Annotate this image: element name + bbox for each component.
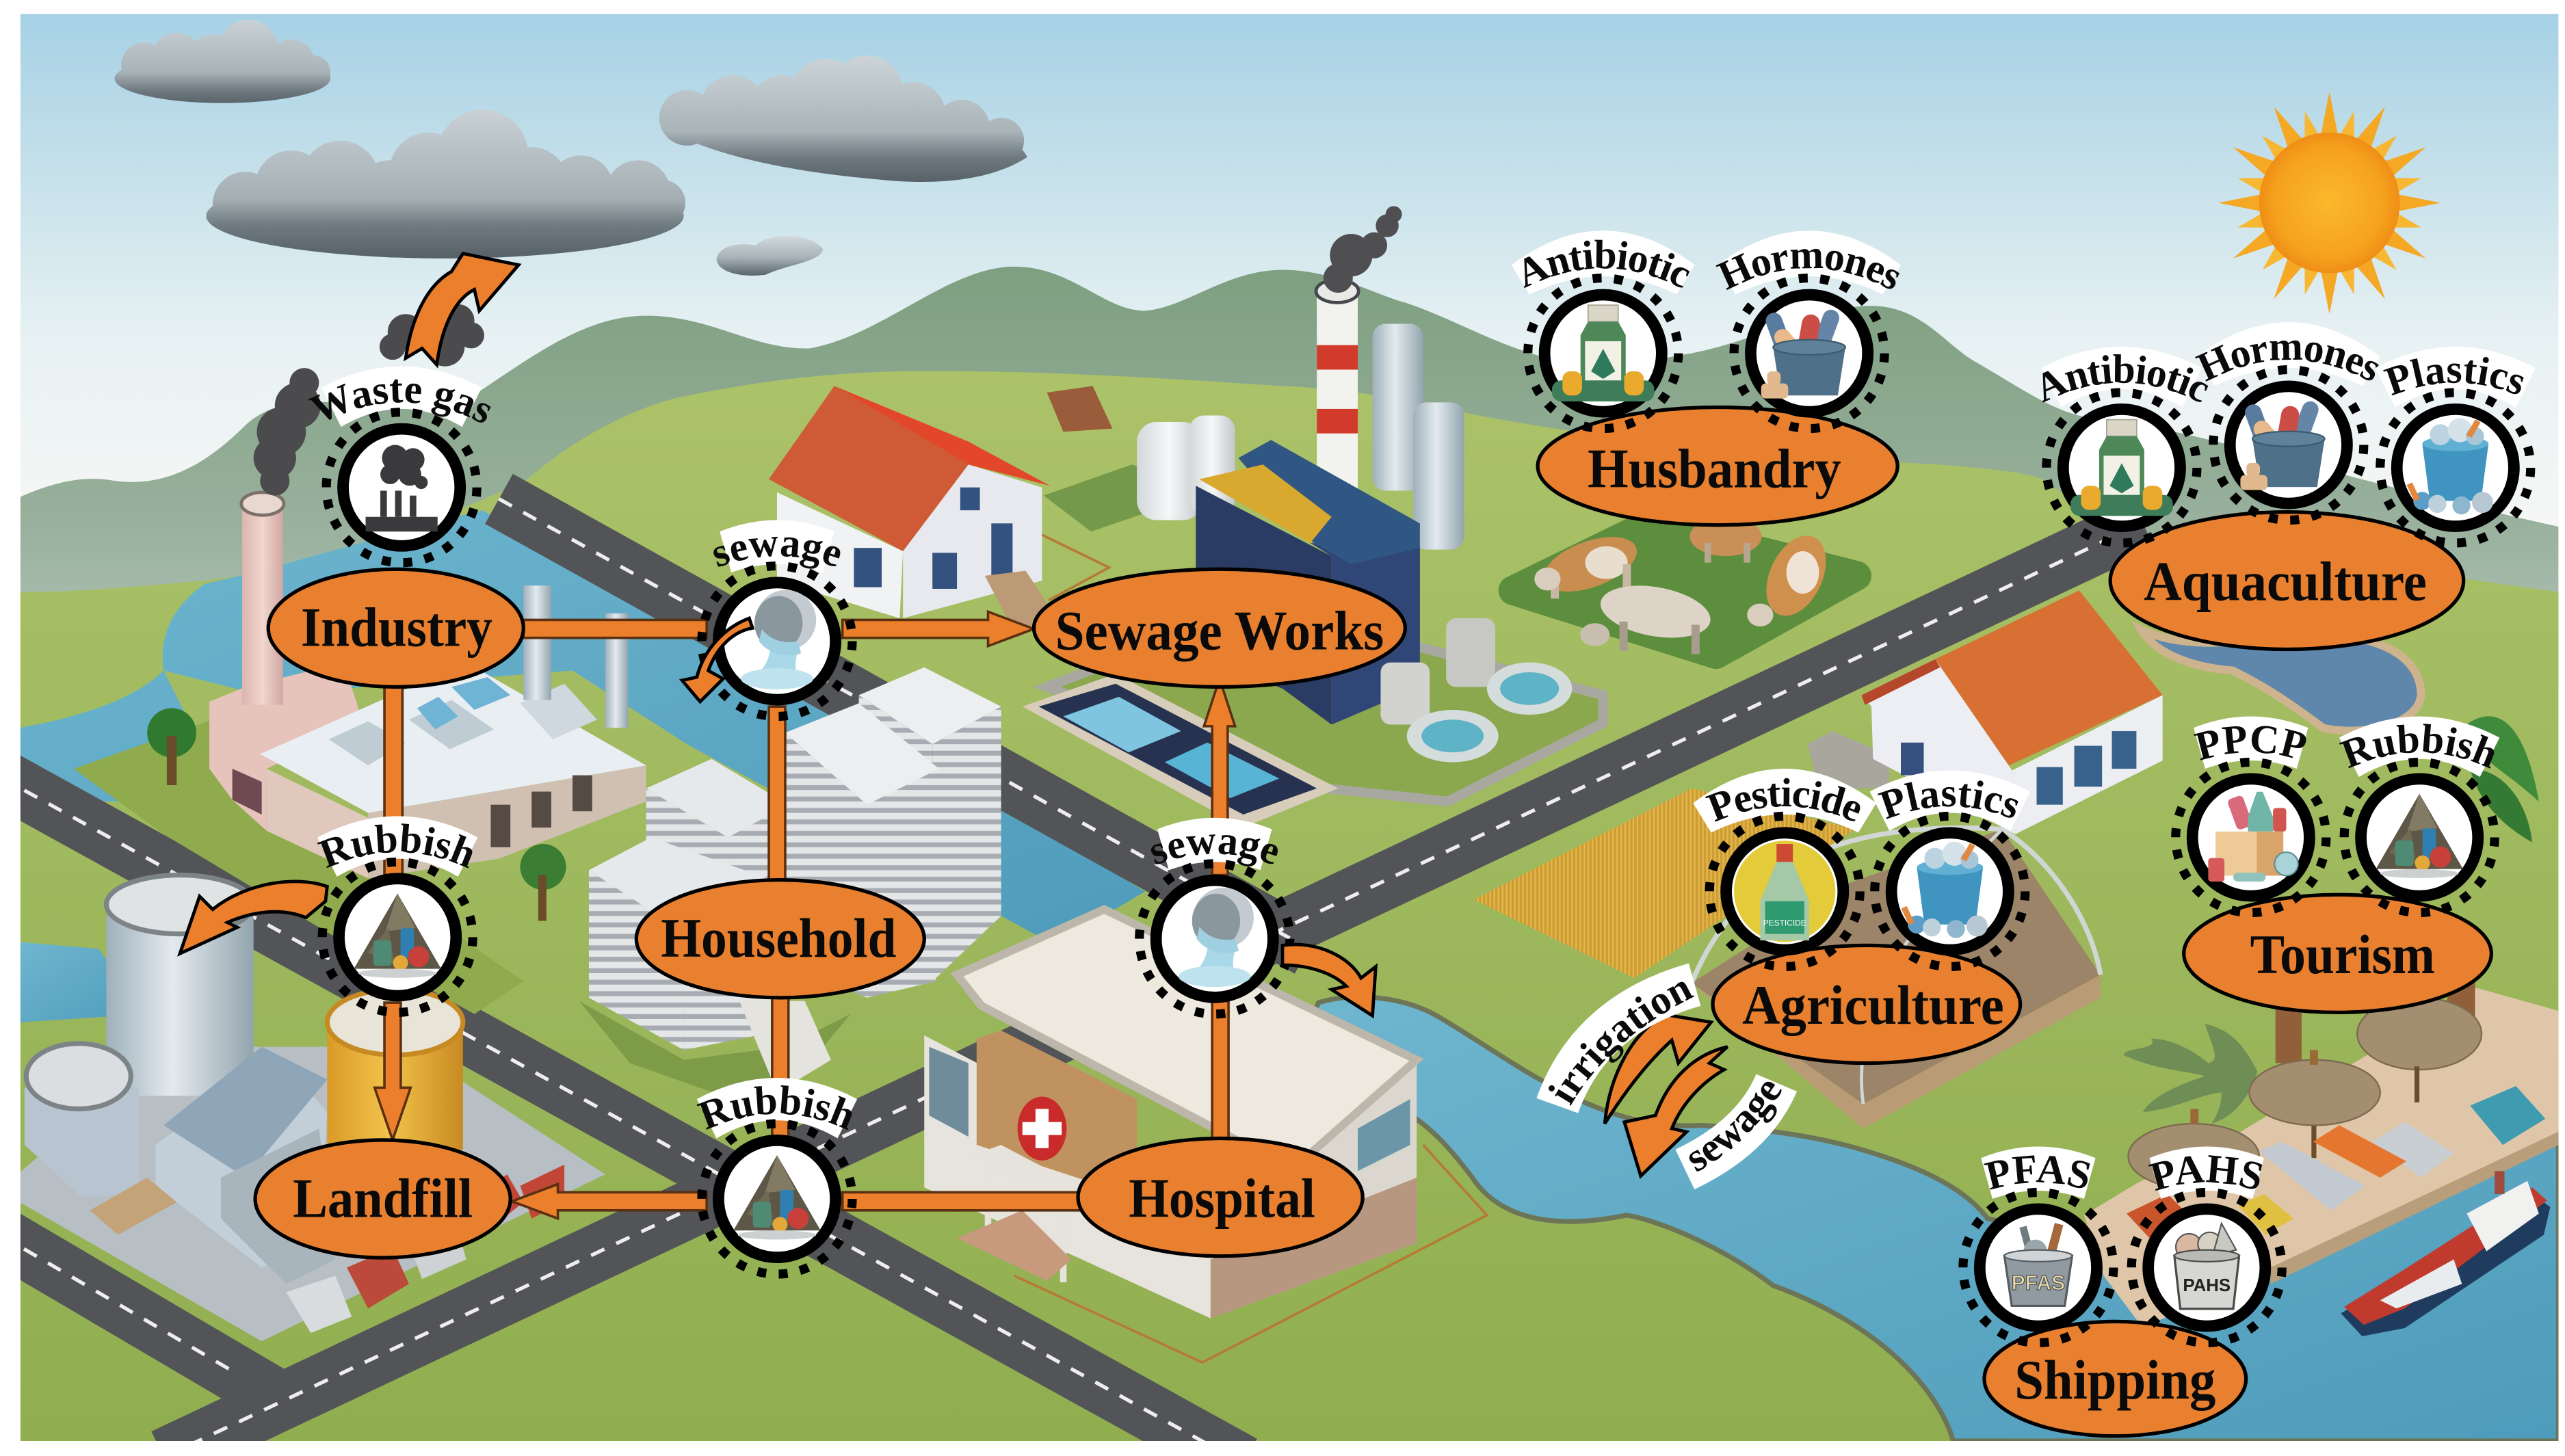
icon: Rubbish (industry) <box>313 816 482 1012</box>
icon: Rubbish (tourism): Rubbish <box>2335 716 2504 777</box>
cloud small top left <box>114 20 330 103</box>
node: Sewage Works: Sewage Works <box>1055 600 1384 661</box>
icon: PFAS: PFAS <box>2012 1272 2065 1295</box>
icon: Pesticide: PESTICIDE <box>1763 918 1806 928</box>
husbandry pasture with cows <box>1513 517 1856 654</box>
arrow: industry to rubbish <box>384 687 402 875</box>
arrow: household to rubbish <box>772 998 789 1141</box>
node: Shipping <box>1984 1321 2246 1436</box>
icon: Hormones (aquaculture) <box>2190 322 2388 520</box>
arrow: hospital to rubbish to landfill <box>512 1184 1083 1219</box>
node: Landfill: Landfill <box>293 1167 473 1229</box>
node: Agriculture <box>1713 945 2021 1063</box>
icon: sewage (hospital): sewage <box>1143 817 1286 874</box>
lower left river <box>21 942 107 1022</box>
icon: Plastics (aquaculture): Plastics <box>2380 347 2532 404</box>
canal and left river <box>20 510 1145 945</box>
aquaculture pond <box>2142 630 2421 731</box>
main river and sea <box>1292 997 2558 1441</box>
label: sewage (agriculture): sewage <box>1677 1069 1791 1180</box>
curved arrow: sewage discharge <box>682 618 752 702</box>
node: Landfill <box>255 1140 510 1258</box>
icon: Pesticide: Pesticide <box>1701 770 1869 830</box>
hospital parcel outline <box>1014 1145 1487 1362</box>
distant green mountains <box>20 267 2558 687</box>
node: Tourism <box>2184 895 2491 1012</box>
node: Aquaculture <box>2110 512 2464 649</box>
cargo ship <box>2341 1171 2550 1336</box>
icon: Rubbish (hospital) <box>693 1077 862 1274</box>
icon: Rubbish (hospital): Rubbish <box>693 1077 862 1139</box>
node: Husbandry: Husbandry <box>1588 438 1841 500</box>
icon: PAHS: PAHS <box>2145 1146 2268 1200</box>
sun <box>2218 92 2441 314</box>
icon: sewage (hospital) <box>1140 817 1290 1014</box>
icon: PAHS <box>2131 1146 2282 1342</box>
right farmhouse <box>1808 590 2163 834</box>
palm shadow on the lawn <box>2123 1024 2257 1124</box>
node: Industry: Industry <box>301 597 492 659</box>
icon: Pesticide <box>1693 769 1876 966</box>
wheat field <box>1474 789 1855 978</box>
curved arrow: waste gas to clouds <box>406 254 518 365</box>
hospital building <box>924 910 1417 1319</box>
node: Shipping: Shipping <box>2014 1349 2215 1411</box>
label: irrigation <box>1539 964 1734 1145</box>
icon: Hormones (husbandry): Hormones <box>1711 232 1908 299</box>
node: Household: Household <box>661 908 897 969</box>
flow arrows <box>375 611 1235 1219</box>
icon: Antibiotic (husbandry) <box>1510 230 1698 429</box>
house lawn and parcel outline <box>1042 464 1211 600</box>
arrow: hospital to sewage <box>1212 1001 1228 1139</box>
icon: PPCP: PPCP <box>2191 715 2311 769</box>
node: Husbandry <box>1538 408 1897 525</box>
sewage works smoke <box>1324 206 1402 293</box>
icon: sewage (industry): sewage <box>713 536 840 569</box>
icon: Antibiotic (husbandry): Antibiotic <box>1510 232 1698 297</box>
cloud upper middle <box>659 55 1027 182</box>
icon: PPCP <box>2176 715 2326 913</box>
node: Agriculture: Agriculture <box>1742 975 2004 1036</box>
node: Hospital <box>1078 1139 1363 1256</box>
node: Tourism: Tourism <box>2250 924 2435 985</box>
icon: Antibiotic (aquaculture): Antibiotic <box>2028 346 2217 411</box>
icon: Hormones (husbandry) <box>1711 230 1908 429</box>
node: Household <box>636 880 924 998</box>
icon: Plastics (agriculture): Plastics <box>1874 770 2027 828</box>
arrow: sewage to sewage works <box>1204 679 1235 875</box>
large cloud <box>206 109 685 259</box>
node: Aquaculture: Aquaculture <box>2144 551 2427 613</box>
icon: PAHS: PAHS <box>2183 1276 2231 1295</box>
industrial smoke <box>254 304 484 496</box>
curved arrow: agriculture sewage <box>1625 1047 1728 1176</box>
beach umbrellas and loungers <box>2127 998 2545 1240</box>
palm trees <box>147 709 2539 1063</box>
sky <box>20 13 2560 536</box>
icon: sewage (industry) <box>702 519 852 717</box>
curved arrow: rubbish discharge <box>180 882 327 953</box>
industry plant <box>74 492 646 1014</box>
icon: Waste gas: Waste gas <box>308 379 491 423</box>
icon: Rubbish (industry): Rubbish <box>313 816 482 877</box>
arrow: rubbish to landfill <box>375 1003 410 1140</box>
icon: Plastics (aquaculture) <box>2376 347 2536 543</box>
arrow: household to sewage <box>769 706 785 880</box>
curved arrow: hospital sewage to river <box>1282 944 1376 1016</box>
icon: Rubbish (tourism) <box>2335 716 2504 913</box>
roads <box>0 499 2143 1456</box>
icon: Waste gas <box>304 366 501 563</box>
node: Hospital: Hospital <box>1129 1167 1315 1229</box>
icon: Antibiotic (aquaculture) <box>2028 346 2217 543</box>
icon: Hormones (aquaculture): Hormones <box>2190 323 2388 391</box>
sewage works plant <box>1023 280 1603 828</box>
label: irrigation: irrigation <box>1539 964 1699 1111</box>
grass hill and base ground <box>20 371 2558 1441</box>
icon: PFAS <box>1963 1146 2114 1342</box>
arrow: industry to sewage works <box>523 611 1034 646</box>
icon: Plastics (agriculture) <box>1870 770 2030 966</box>
label: sewage (agriculture) <box>1652 1047 1808 1194</box>
node: Sewage Works <box>1034 569 1405 687</box>
node: Industry <box>268 569 523 687</box>
curved arrow: irrigation <box>1605 1014 1711 1124</box>
landfill facilities <box>20 875 605 1341</box>
top house <box>769 386 1112 638</box>
small cloud <box>717 236 823 276</box>
dock and beach <box>2084 988 2558 1328</box>
household towers <box>579 667 1001 1112</box>
icon: PFAS: PFAS <box>1981 1146 2096 1199</box>
greenhouse <box>1692 828 2101 1128</box>
